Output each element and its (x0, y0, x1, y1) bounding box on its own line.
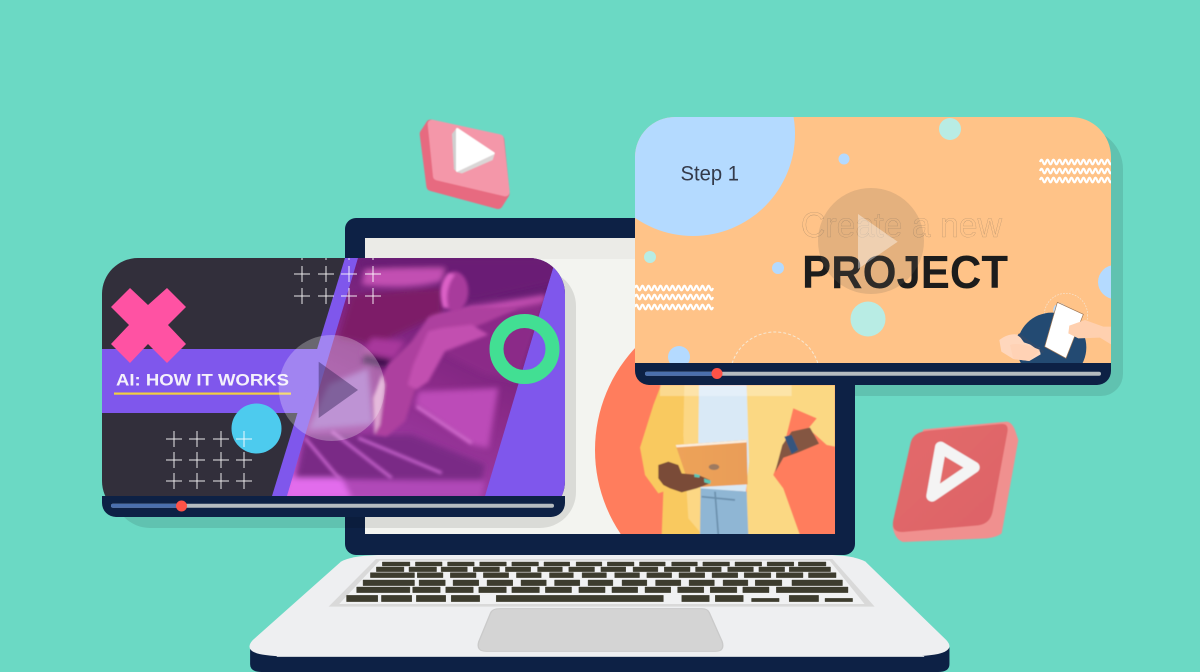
blue blob (1053, 303, 1065, 313)
dashed halo (1044, 293, 1088, 320)
photo: hand typing on laptop (280, 258, 565, 498)
purple right panel (272, 258, 565, 496)
shirt (698, 385, 749, 492)
play button overlay (279, 335, 385, 441)
text: step 1: Step 1 (680, 162, 739, 186)
dashed arc (732, 332, 818, 363)
keyboard tray (329, 559, 875, 607)
zigzag right (1040, 160, 1118, 182)
play button overlay (818, 188, 924, 294)
keyboard keys (347, 562, 853, 602)
blazer right (747, 385, 835, 535)
card title: AI: HOW IT WORKS (116, 372, 289, 390)
cyan circle (232, 404, 282, 454)
keyboard highlight lines (305, 431, 442, 480)
confetti dots (644, 118, 1132, 368)
tint band (660, 385, 792, 396)
progress bar (635, 363, 1111, 385)
apple logo (709, 464, 719, 470)
watch (784, 435, 798, 454)
tablet (676, 440, 748, 488)
navy circle (1019, 312, 1086, 363)
thumb (440, 271, 468, 311)
left hand with pen (999, 334, 1043, 361)
progress bar (102, 496, 565, 517)
blazer left (640, 385, 702, 535)
screen (365, 238, 835, 534)
video card: step 1 create a new project (635, 117, 1111, 385)
forearm (775, 428, 819, 472)
left lapel (683, 385, 700, 532)
text: create a new: Create a new (801, 206, 1003, 245)
text: project: PROJECT (802, 246, 1008, 298)
laptop screen bezel (345, 218, 855, 555)
icon: red 3D play button (893, 422, 1018, 542)
trackpad (478, 609, 723, 651)
orange circle backdrop (595, 348, 835, 534)
video card: AI how it works (102, 244, 565, 517)
plus pattern top (294, 258, 381, 304)
green ring (496, 321, 552, 377)
phone (1045, 302, 1083, 358)
title underline (114, 392, 291, 395)
purple title band (102, 349, 321, 413)
right hand (1068, 320, 1112, 345)
laptop base (249, 555, 949, 672)
shadow: right video card (855, 129, 1123, 396)
icon: pink 3D play button (425, 124, 505, 204)
icon: pink X (111, 288, 186, 363)
index finger and hand (372, 306, 518, 436)
photo top tone (357, 258, 554, 286)
zigzag left (635, 286, 713, 309)
plus pattern bottom (166, 431, 252, 489)
hand (658, 462, 710, 492)
illustration: hands with phone (999, 293, 1111, 363)
jeans (700, 488, 748, 535)
large blue circle (635, 117, 795, 236)
laptop (249, 218, 949, 672)
woman holding tablet (640, 385, 835, 535)
shadow: left video card (114, 270, 576, 528)
